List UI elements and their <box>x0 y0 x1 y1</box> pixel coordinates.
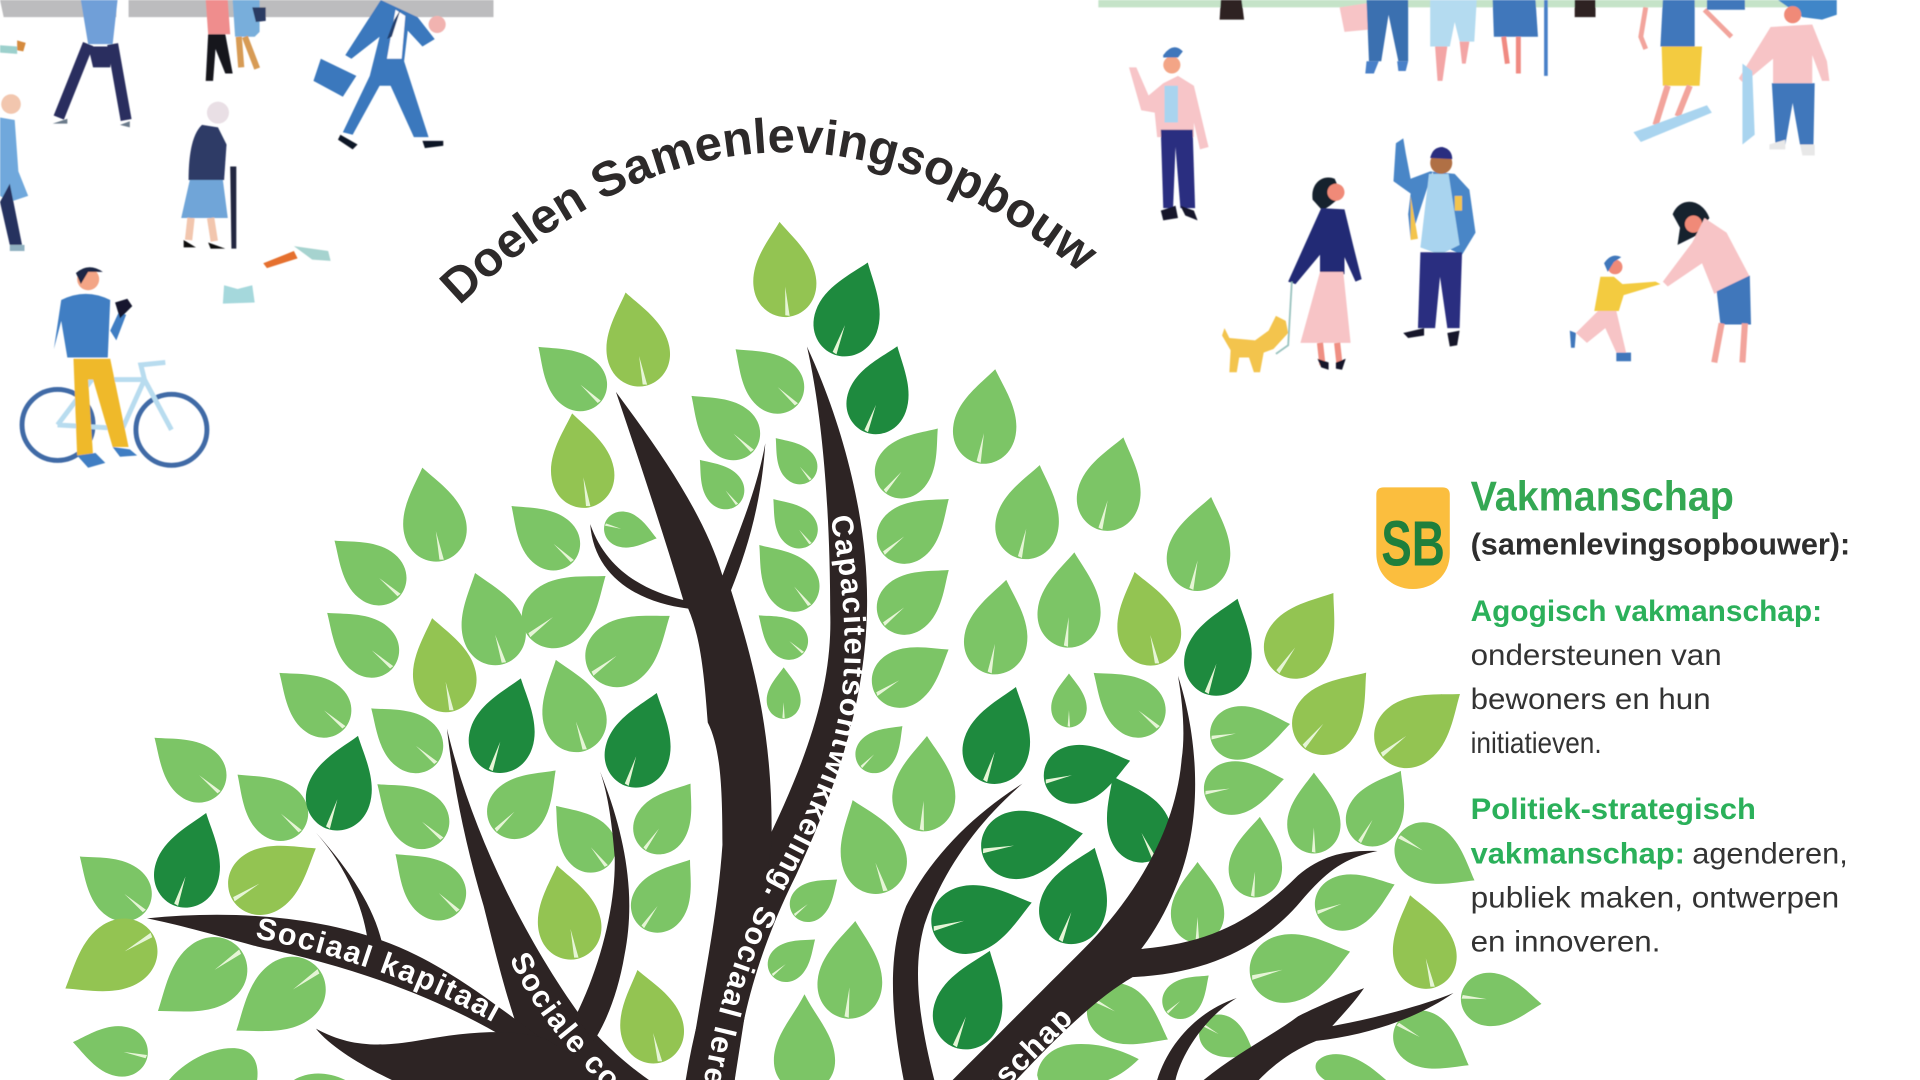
figure: old woman with cane <box>181 102 236 249</box>
text block: agogisch vakmanschap <box>1471 595 1822 760</box>
panel: vakmanschap <box>1376 473 1850 958</box>
figure: group with handbag and cane <box>1340 0 1548 81</box>
figure: walking man <box>53 0 130 127</box>
text block: politiek-strategisch vakmanschap: Politiek-strategisch <box>1471 793 1756 826</box>
trunk and branches <box>147 347 1453 1080</box>
figure: skateboarder <box>1633 0 1745 142</box>
figure: woman holding skateboard <box>1739 0 1837 156</box>
icon: SB shield badge: SB <box>1381 509 1445 580</box>
icon: litter on ground <box>223 246 331 304</box>
branch label: capaciteitsontwikkeling en sociaal leren: Capaciteitsontwikkeling. Sociaal lere <box>704 516 866 1080</box>
text block: politiek-strategisch vakmanschap: agenderen, <box>1692 837 1848 870</box>
icon: SB shield badge <box>1376 487 1450 589</box>
figure: couple <box>206 0 266 81</box>
scene: pedestrians top left <box>0 0 493 468</box>
figure: businessman with briefcase <box>313 0 446 149</box>
text block: agogisch vakmanschap: bewoners en hun <box>1471 683 1711 716</box>
tree illustration <box>65 222 1542 1080</box>
text block: agogisch vakmanschap: Agogisch vakmanschap: <box>1471 595 1822 628</box>
title: Doelen Samenlevingsopbouw: Doelen Samenlevingsopbouw <box>439 118 1097 304</box>
text block: agogisch vakmanschap: initiatieven. <box>1471 727 1602 760</box>
figure: elderly man at left edge <box>0 94 28 251</box>
branch label: sociaal kapitaal: Sociaal kapitaal <box>256 918 499 1022</box>
scene: neighbourhood residents top right <box>1098 0 1837 372</box>
figure: cyclist with phone <box>22 267 207 468</box>
text block: politiek-strategisch vakmanschap <box>1471 793 1848 958</box>
pavement strip <box>0 0 493 17</box>
text block: politiek-strategisch vakmanschap: en innoveren. <box>1471 925 1660 958</box>
heading: Vakmanschap: Vakmanschap <box>1471 473 1734 520</box>
figure: man in pink jacket waving <box>1129 47 1209 220</box>
text block: agogisch vakmanschap: ondersteunen van <box>1471 639 1722 672</box>
figure: woman with dog <box>1222 178 1362 372</box>
icon: litter fragment <box>0 40 26 54</box>
leaves <box>47 219 1544 1080</box>
figure: child reaching out <box>1570 256 1660 361</box>
figure: man in blue jacket waving <box>1393 138 1476 347</box>
park strip with tree stumps <box>1098 0 1788 20</box>
text block: politiek-strategisch vakmanschap: publiek maken, ontwerpen <box>1471 881 1839 914</box>
text block: politiek-strategisch vakmanschap: vakmanschap: <box>1471 837 1685 870</box>
figure: woman bending to child <box>1663 202 1751 362</box>
subheading: samenlevingsopbouwer: (samenlevingsopbouwer): <box>1471 528 1850 562</box>
